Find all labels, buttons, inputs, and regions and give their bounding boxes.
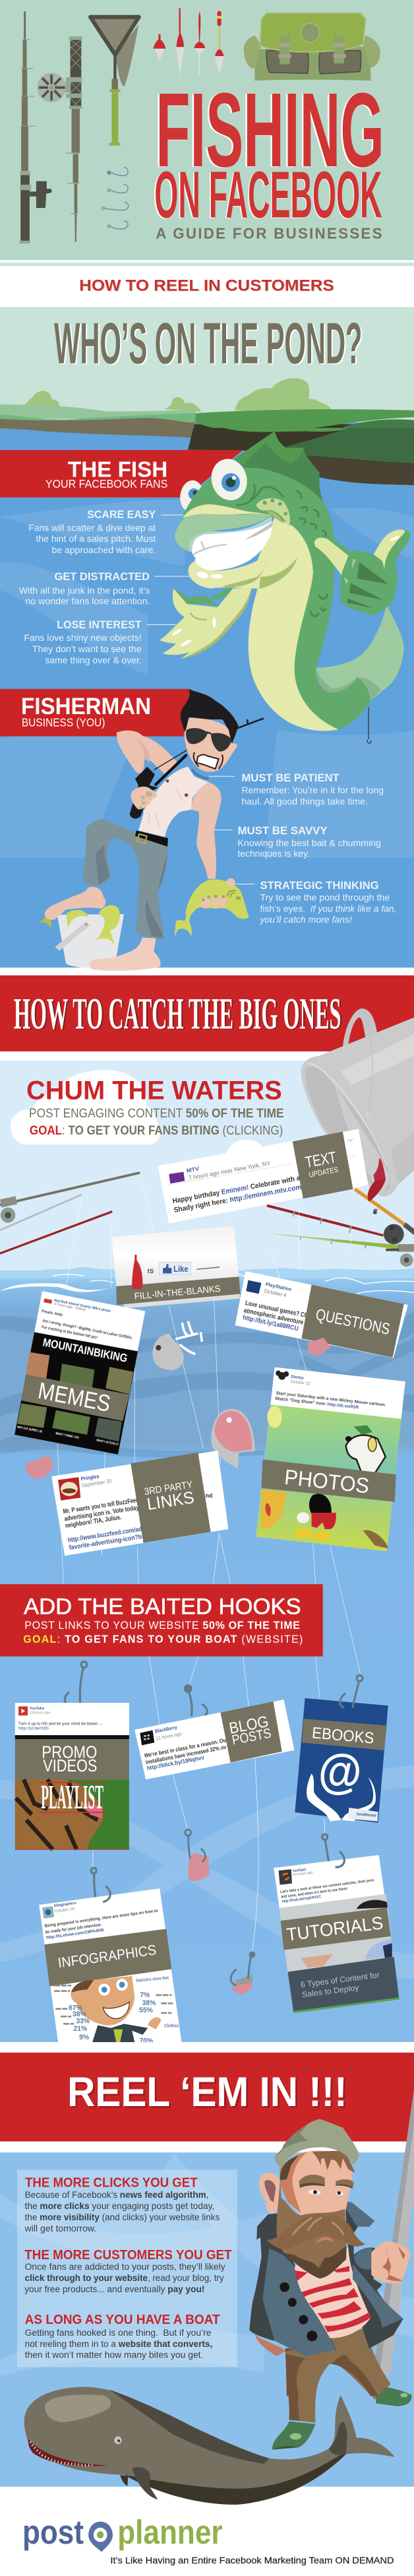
text: must be savvy: techniques is key. [237,849,310,859]
text: get distracted: GET DISTRACTED [55,571,150,583]
card: third party links: advertising icon is. Vote today [64,1504,140,1523]
card: text updates: Happy birthday Eminem! Celebrate with a [172,1174,301,1205]
text: lose interest: They don’t want to see the [32,644,142,654]
band above catch banner [0,968,414,975]
card: memes: WHAT I THINK I DO [55,1432,79,1440]
card: third party links: Pringles [80,1473,100,1482]
illustration: left fishing rods [0,1173,140,1253]
card: fill-in-the-blanks: IS [147,1268,154,1274]
card: memes: For crashing in the bottom left pic! [42,1325,98,1340]
card: third party links: 3RD PARTY [144,1480,194,1498]
card: infographics: 38% [142,1999,156,2007]
text: lose interest: LOSE INTEREST [57,619,142,631]
text: the more customers you get [24,2248,232,2294]
card: tutorials: and cons, and when it's best to use them: [281,1887,348,1899]
card: infographics: Clothes [164,2022,179,2028]
text: must be patient [208,772,384,807]
card: photos: Disney [291,1375,304,1381]
scene: water waves and crests [0,1267,414,1457]
section: reel em in [0,2153,414,2575]
hook with bait: tutorials side [231,1952,255,1995]
card: questions: October 4 [264,1288,287,1298]
card: third party links: http://www.buzzfeed.com/adv [67,1525,146,1544]
banner: fisherman: BUSINESS (YOU) [22,716,105,729]
heading: how to reel in customers: HOW TO REEL IN CUSTOMERS [80,278,335,296]
background: pond sky [0,307,414,436]
card: infographics: 33% [76,2017,90,2026]
card: memes: WHY CAT SUPER 1 00 [17,1426,42,1434]
hook: promo [65,1661,87,1708]
icon: fishing rod 1 [20,11,52,244]
hook with bait: blog [185,1830,210,1881]
card: photos: Start your Saturday with a new Mickey Mouse cartoon. [276,1391,386,1408]
section: pond text [0,450,414,859]
white footer [0,2487,414,2575]
card: memes: 4 hours ago · Edited [54,1302,86,1312]
text: lose interest: Fans love shiny new objects! [24,633,142,643]
banner: how to catch the big ones [0,975,414,1051]
card: third party links: favorite-advertising-icon?b= [69,1533,146,1552]
card: questions: http://bit.ly/1a88RCU [242,1314,299,1333]
background: header [0,0,414,260]
text: scare easy: SCARE EASY [87,509,156,521]
card: blog posts: We're best in class for a reason. Ou [144,1736,227,1759]
banner: add the baited hooks: ADD THE BAITED HOOKS [24,1595,301,1620]
card: questions [235,1271,408,1358]
text: the more clicks you get: the more clicks your engaging posts get today, [25,2201,214,2211]
card: promo videos: PLAYLIST [41,1779,104,1816]
card: ebooks: @ [318,1745,362,1799]
hook: blog [185,1686,207,1717]
text: get distracted: no wonder fans lose attention. [25,597,150,607]
card: promo videos: YouTube [30,1707,44,1711]
card: promo videos: Turn it up to HD and let your mind be blown → [18,1722,103,1727]
banner: the fish: THE FISH [68,457,167,482]
card: infographics: 9% [79,2033,90,2041]
text: the more clicks you get: the more visibility (and clicks) your website links [25,2212,220,2222]
background: reel water [0,2151,414,2487]
icon: fishing rod 2 with reel [37,36,82,242]
text: as long as you have a boat: then it won’t matter how many bites you get. [25,2350,203,2360]
card: blog posts: 11 hours ago [156,1731,183,1741]
white band below banner [0,1051,414,1061]
card: text updates: 7 hours ago near New York, NY [188,1160,271,1181]
banner: reel em in [0,2053,414,2142]
text: must be patient: haul. All good things take time. [241,797,368,807]
card: promo videos: 14 hours ago [30,1711,50,1715]
illustration: green fish [160,431,411,743]
card: photos: PHOTOS [283,1465,370,1498]
card: third party links: September 20 [81,1478,112,1488]
section: header [0,8,414,438]
logo: post planner: post [22,2513,84,2551]
card: tutorials [274,1855,399,2013]
card: tutorials: 10 hours ago [293,1870,313,1877]
section: catch the big ones [0,880,414,1287]
text: scare easy: Fans will scatter & dive deep at [28,523,156,533]
text: scare easy: the hint of a sales pitch. Must [36,534,156,544]
card: promo videos: VIDEOS [43,1757,97,1775]
illustration: bucket and right rods [267,1008,414,1267]
background: chum water [0,1271,414,2042]
hook: tutorials [322,1834,344,1867]
text: strategic thinking: Try to see the pond through the [260,892,390,903]
card: photos: Watch "Dog Show" now: http://di.sn/fOR [275,1397,359,1410]
card: text updates: Shady right here: http://eminem.mtv.com [173,1183,302,1214]
card: tutorials: HubSpot [293,1868,307,1873]
card: fill-in-the-blanks: Like [173,1265,189,1274]
card: blog posts: BlackBerry [154,1724,178,1734]
tagline: It’s Like Having an Entire Facebook Marketing Team ON DEMAND [110,2556,394,2565]
heading: chum the waters: CHUM THE WATERS [26,1076,282,1106]
card: questions: atmospheric adventure [243,1307,305,1327]
card: third party links: Mr. P wants you to tell BuzzFeed [63,1496,139,1515]
section: baited hooks cards [0,1661,414,2152]
text: scare easy: be approached with care. [51,545,156,555]
card: promo videos [15,1703,129,1850]
logo: post planner [22,2513,223,2552]
card: blog posts: installations have increased 32% ov [145,1744,227,1766]
card: tutorials: Sales to Deploy [301,1983,359,1999]
card: infographics: 21% [73,2025,88,2033]
water swooshes [0,2153,414,2376]
text panel [17,2169,237,2367]
section: chum cards top [111,1129,369,1308]
section: chum content cards [0,1271,408,1725]
banner: fisherman: FISHERMAN [21,694,151,719]
banner: add the baited hooks: POST LINKS TO YOUR WEBSITE 50% OF THE TIME [24,1620,300,1632]
card: fill-in-the-blanks: FILL-IN-THE-BLANKS [134,1283,221,1302]
text: must be savvy: Knowing the best bait & chumming [237,838,381,848]
card: fill-in-the-blanks [111,1226,240,1308]
illustration: clouds [11,1070,268,1162]
card: infographics: 7% [140,1991,150,1999]
card: memes: MEMES [36,1378,113,1417]
hook: infographics [91,1868,110,1902]
illustration: fisherman [38,689,264,971]
card: ebooks [295,1698,388,1823]
text: lose interest: same thing over & over. [45,655,142,665]
logo: post planner: planner [117,2513,223,2551]
background: header stripe [0,263,414,266]
text: get distracted: With all the junk in the pond, it’s [19,585,150,596]
card: infographics: be ready for your job interview: [45,1923,102,1935]
card: memes: Red Bull shared Gnarly! Mtb's photo. [54,1299,112,1313]
white band above reel banner [0,2042,414,2053]
card: blog posts [134,1700,295,1779]
card: infographics: 55% [139,2006,153,2014]
banner: the fish: YOUR FACEBOOK FANS [45,478,167,490]
text: must be patient: Remember: You’re in it for the long [241,785,384,795]
card: text updates: UPDATES [309,1166,339,1179]
card: text updates [158,1129,369,1223]
text: strategic thinking: fish’s eyes. If you think like a fan, [260,904,397,914]
banner: add the baited hooks [0,1584,323,1657]
banner: add the baited hooks: GOAL: TO GET FANS TO YOUR BOAT (WEBSITE) [23,1634,303,1645]
illustration: chum chunk left [25,1455,54,1479]
card: memes: Preach. #mtb [42,1309,63,1317]
scene: near shore [188,428,414,485]
icon: hooks [102,168,129,229]
text: the more customers you get: click through to your website, read your blog, try [25,2273,224,2283]
card: infographics: Being prepared is everything. Here are more tips on how to [44,1909,158,1929]
illustration: chum chunk [308,1338,330,1356]
card: infographics: 67% [69,2004,83,2012]
card: text updates: MTV [186,1166,200,1174]
card: memes: Am I wrong, though? ~BigMtb. Credit to Luther Griffiths [42,1319,133,1340]
text: strategic thinking: STRATEGIC THINKING [260,880,379,892]
text: must be patient: MUST BE PATIENT [241,772,340,784]
text: get distracted [19,571,189,607]
card: photos: October 12 [290,1379,310,1386]
illustration: salmon steak [211,1408,254,1469]
card: infographics: 38% [73,2010,87,2018]
background: pond water [0,422,414,968]
card: tutorials: TUTORIALS [285,1913,384,1945]
card: tutorials: 6 Types of Content for [300,1970,380,1989]
text: as long as you have a boat: Getting fans hooked is one thing. But if you’re [25,2328,211,2338]
card: third party links: nd [206,1492,212,1499]
white band below reel banner [0,2142,414,2152]
card: third party links: neighbors! TIA, Julius. [65,1514,122,1530]
card: third party links [51,1451,228,1556]
text: must be savvy [214,825,381,859]
text: the more customers you get: Once fans are addicted to your posts, they’ll likely [25,2262,225,2272]
banner: reel em in: REEL ‘EM IN !!! [67,2069,347,2115]
text: lose interest [24,619,176,665]
card: infographics: Infographics [53,1901,77,1908]
card: text updates: TEXT [304,1149,338,1172]
text: must be savvy: MUST BE SAVVY [237,825,328,837]
text: the more clicks you get: THE MORE CLICKS YOU GET [25,2175,198,2190]
icon: tackle bag [244,13,380,81]
icon: landing net [90,17,139,146]
card: infographics: 70% [139,2037,154,2045]
text: the more clicks you get: will get tomorrow. [24,2224,96,2233]
text: as long as you have a boat: not reeling them in to a website that converts, [25,2339,212,2349]
illustration: whale [24,2387,395,2505]
text: the more customers you get: THE MORE CUSTOMERS YOU GET [24,2248,232,2262]
text: strategic thinking [235,880,397,925]
scene: far shore and trees [0,378,414,438]
card: tutorials: Let's take a look at these six content vehicles, their pros [280,1878,374,1894]
card: promo videos: PROMO [42,1743,97,1762]
water swooshes [0,500,414,858]
illustration: fishing lines [66,1173,300,1287]
water swooshes [0,1766,414,1979]
fishing lines [93,1757,325,1952]
card: memes: MOUNTAINBIKING [42,1336,129,1365]
card: infographics: http://ts.ehow.com/19PA4hN [45,1928,104,1940]
text: strategic thinking: you’ll catch more fans! [259,915,352,925]
card: memes: WHAT I ACTUALLY [96,1438,119,1447]
illustration: fish skeleton bait [152,1321,202,1370]
card: ebooks: EBOOKS [311,1725,374,1748]
text: the more clicks you get [24,2175,220,2233]
card: questions: Love unusual games? Ch [245,1300,308,1319]
card: third party links: LINKS [146,1488,195,1514]
card: infographics: October 18 [55,1907,75,1914]
card: ebooks: SendRocket [357,1812,376,1818]
card: blog posts: POSTS [231,1726,272,1748]
card: infographics: INFOGRAPHICS [57,1942,157,1971]
heading: how to reel in customers: HOW TO REEL IN CUSTOMERS [79,277,334,294]
text: goal: GOAL: TO GET YOUR FANS BITING (CLICKING) [30,1123,283,1137]
icon: fishing floats [153,8,224,77]
card: blog posts: http://blick.by/19Nqhvv [146,1754,205,1771]
text: the more clicks you get: Because of Facebook’s news feed algorithm, [25,2190,208,2200]
text: post engaging content: POST ENGAGING CONTENT 50% OF THE TIME [29,1106,284,1120]
subtitle: a guide for businesses: A GUIDE FOR BUSINESSES [156,224,382,242]
card: infographics [39,1888,182,2045]
banner: reel em in: REEL ‘EM IN !!! [69,2071,349,2117]
illustration: old fisherman [249,2084,414,2396]
text: the more customers you get: your free products... and eventually pay you! [24,2284,204,2294]
fishing lines [57,1298,361,1725]
card: promo videos: http://yt.be/XfjS [18,1727,49,1731]
text: as long as you have a boat [25,2313,220,2360]
card: tutorials: http://hub.am/1qKRX1C [281,1895,322,1904]
card: blog posts: BLOG [228,1713,270,1738]
banner: the fish [0,450,243,498]
text: scare easy [28,509,185,555]
card: questions: QUESTIONS [314,1306,392,1338]
card: memes [15,1291,145,1455]
background: chum sky [0,1061,414,1278]
card: photos [256,1367,405,1551]
hook: ebooks [340,1675,363,1708]
text: as long as you have a boat: AS LONG AS YOU HAVE A BOAT [25,2313,220,2327]
illustration: fisherman legs and boots [272,2332,412,2449]
card: questions: PlayStation [265,1281,293,1292]
card: infographics: Statistics show that [136,1975,169,1983]
banner: fisherman [0,689,190,737]
